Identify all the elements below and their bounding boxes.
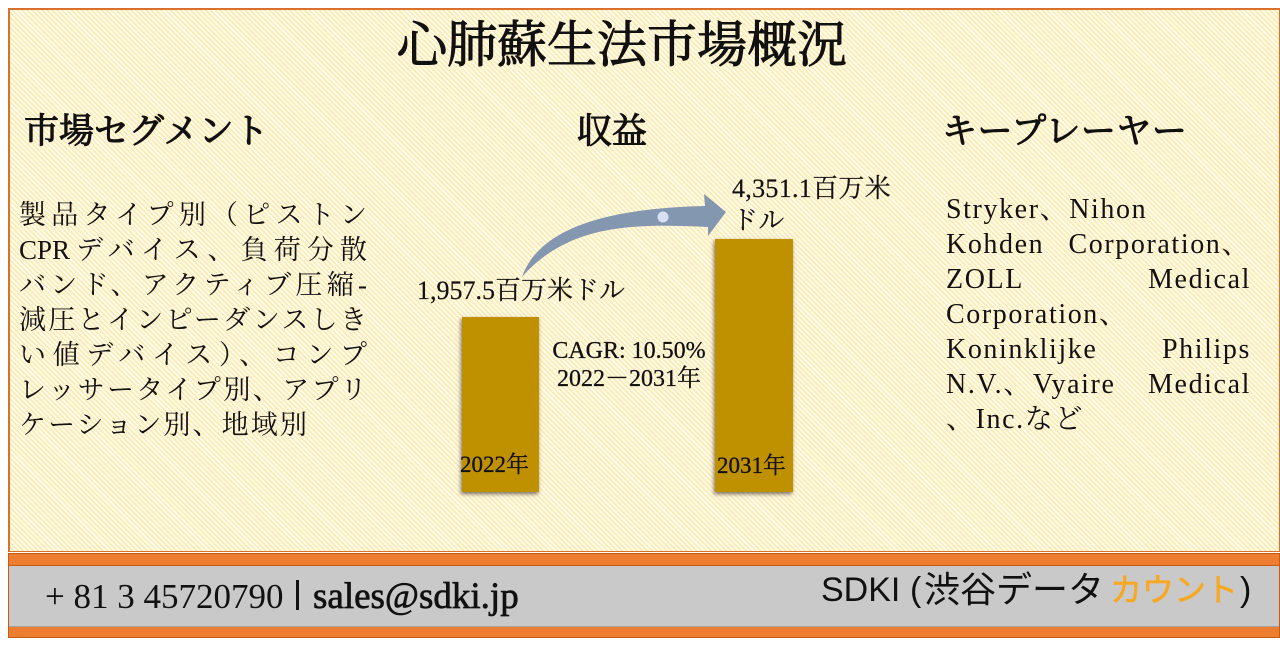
text block: key players: Kohden <box>946 229 1044 260</box>
label: CAGR: 2022－2031年 <box>557 366 701 392</box>
contact details: + 81 3 45720790 <box>45 577 284 616</box>
contact details <box>45 576 519 617</box>
label: year 2031: 2031年 <box>717 453 786 478</box>
text block: key players: 、Inc.など <box>946 404 1084 435</box>
icon: growth arrow <box>522 194 726 277</box>
brand name: カウント <box>1110 572 1238 608</box>
brand name: ) <box>1240 571 1251 609</box>
text block: key players <box>946 194 1251 435</box>
text block: market segments <box>19 200 367 440</box>
text block: key players: Stryker、Nihon <box>946 194 1147 225</box>
label: 2031 value <box>732 174 891 235</box>
label: 2031 value: 4,351.1百万米 <box>732 174 891 203</box>
brand name: ( <box>910 571 921 609</box>
text block: market segments: い値デバイス）、コンプ <box>19 340 367 370</box>
contact bar <box>9 565 1279 627</box>
label: CAGR: CAGR: 10.50% <box>552 338 706 364</box>
label: year 2022: 2022年 <box>460 452 529 477</box>
text block: key players: ZOLL <box>946 264 1024 295</box>
brand name: SDKI <box>821 571 900 609</box>
text block: market segments: ケーション別、地域別 <box>19 410 309 440</box>
text block: key players: Medical <box>1148 369 1251 400</box>
text block: key players: Corporation、 <box>1068 229 1251 260</box>
text block: key players: Philips <box>1162 334 1251 365</box>
text block: market segments: バンド、アクティブ圧縮- <box>19 270 367 300</box>
text block: key players: Koninklijke <box>946 334 1097 365</box>
text block: market segments: レッサータイプ別、アプリ <box>19 375 367 405</box>
label: 2022 value: 1,957.5百万米ドル <box>417 276 625 305</box>
bar: 2022 <box>462 317 539 492</box>
heading: key players: キープレーヤー <box>942 112 1187 151</box>
bar: 2031 <box>715 239 793 492</box>
brand name: 渋谷データ <box>924 569 1104 610</box>
text block: key players: Corporation、 <box>946 299 1129 330</box>
footer band <box>8 553 1280 638</box>
label: CAGR <box>552 338 706 392</box>
text block: key players: Medical <box>1148 264 1251 295</box>
title: 心肺蘇生法市場概況 <box>397 17 847 73</box>
heading: revenue: 収益 <box>577 112 647 151</box>
contact details: sales@sdki.jp <box>313 576 519 617</box>
text block: market segments: CPRデバイス、負荷分散 <box>19 235 367 265</box>
heading: market segments: 市場セグメント <box>24 112 269 151</box>
brand name <box>821 569 1251 610</box>
label: 2031 value: ドル <box>732 206 785 235</box>
text block: market segments: 製品タイプ別（ピストン <box>19 200 367 230</box>
text block: key players: N.V.、Vyaire <box>946 369 1116 400</box>
text block: market segments: 減圧とインピーダンスしき <box>19 305 367 335</box>
